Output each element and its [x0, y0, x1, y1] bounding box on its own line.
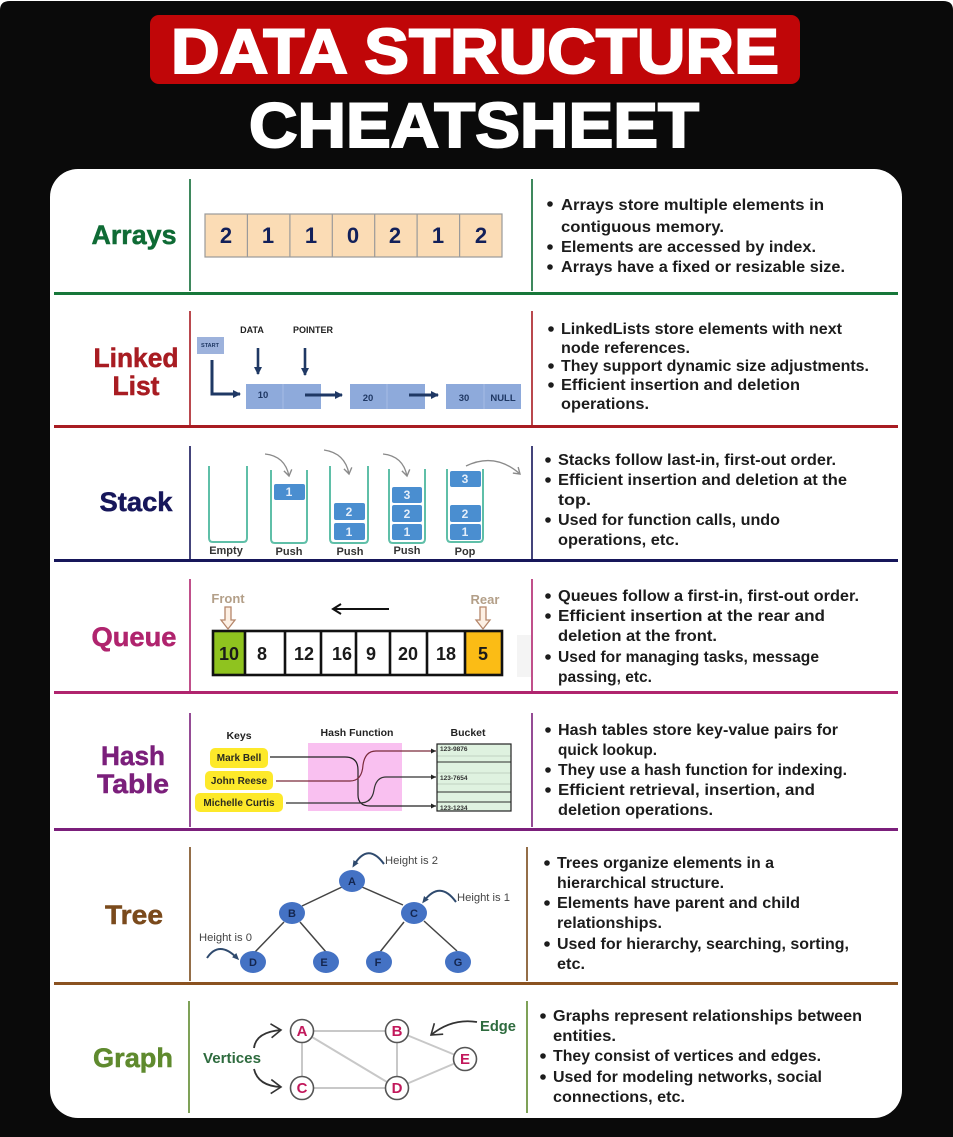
heading: linked list: List [112, 371, 160, 401]
graph diagram: Edge [480, 1018, 516, 1035]
queue diagram: Rear [471, 592, 499, 607]
stack diagram: 1 [286, 485, 293, 499]
hash table diagram: 123-7654 [440, 775, 468, 782]
tree diagram: B [288, 908, 296, 920]
array diagram [205, 214, 502, 257]
graph diagram: E [460, 1051, 470, 1068]
queue diagram [211, 591, 531, 677]
array diagram: 2 [389, 223, 401, 248]
bullets: queue: Used for managing tasks, message [558, 649, 819, 666]
linked list diagram: 20 [363, 393, 373, 404]
bullets: hash table: quick lookup. [558, 742, 657, 759]
hash table diagram: Mark Bell [217, 753, 261, 764]
bullets: queue: passing, etc. [558, 669, 652, 686]
array diagram: 0 [347, 223, 359, 248]
stack diagram: 2 [404, 507, 411, 521]
queue diagram: 8 [257, 644, 267, 664]
stack diagram: 3 [404, 488, 411, 502]
bullets: stack: Used for function calls, undo [558, 512, 780, 529]
stack diagram: Pop [455, 546, 476, 558]
heading: arrays: Arrays [92, 220, 176, 250]
linked list diagram [197, 325, 521, 409]
panel: queue [54, 579, 898, 694]
graph diagram [203, 1018, 516, 1100]
hash table diagram: 123-1234 [440, 805, 468, 812]
panel: stack [54, 446, 898, 562]
heading: linked list [94, 343, 178, 401]
linked list diagram: START [201, 343, 220, 349]
bullets: stack: operations, etc. [558, 532, 679, 549]
main panel [50, 169, 902, 1118]
stack diagram: 2 [346, 505, 353, 519]
graph diagram: D [392, 1080, 403, 1097]
bullets: tree [544, 855, 849, 973]
tree diagram: Height is 2 [385, 855, 438, 867]
queue diagram: 18 [436, 644, 456, 664]
hash table diagram: 123-9876 [440, 746, 468, 753]
bullets: graph: They consist of vertices and edges. [553, 1048, 821, 1065]
bullets: stack: Efficient insertion and deletion at the [558, 472, 847, 489]
panel: graph [93, 1001, 862, 1113]
queue diagram: 5 [478, 644, 488, 664]
bullets: tree: hierarchical structure. [557, 875, 724, 892]
bullets: stack: top. [558, 492, 591, 509]
stack diagram: Empty [209, 545, 244, 557]
bullets: linked list: Efficient insertion and deletion [561, 377, 800, 394]
queue diagram: 12 [294, 644, 314, 664]
panel: hash table [54, 713, 898, 831]
bullets: tree: etc. [557, 956, 585, 973]
bullets: graph: Used for modeling networks, social [553, 1069, 822, 1086]
bullets: hash table: deletion operations. [558, 802, 713, 819]
heading: hash table: Table [97, 769, 169, 799]
heading: tree: Tree [105, 900, 163, 930]
stack diagram: 1 [404, 525, 411, 539]
linked list diagram: DATA [240, 325, 264, 335]
bullets: queue: deletion at the front. [558, 628, 717, 645]
bullets: graph: connections, etc. [553, 1089, 685, 1106]
heading: stack: Stack [100, 487, 173, 517]
tree diagram: A [348, 876, 356, 888]
stack diagram: Push [394, 545, 421, 557]
graph diagram: B [392, 1023, 403, 1040]
panel: arrays [54, 179, 898, 295]
bullets: linked list: LinkedLists store elements with next [561, 321, 842, 338]
tree diagram: D [249, 957, 257, 969]
bullets: hash table: They use a hash function for indexing. [558, 762, 847, 779]
bullets: stack: Stacks follow last-in, first-out order. [558, 452, 836, 469]
stack diagram: 2 [462, 507, 469, 521]
bullets: arrays: Elements are accessed by index. [561, 239, 816, 256]
bullets: tree: relationships. [557, 915, 662, 932]
bullets: tree: Trees organize elements in a [557, 855, 774, 872]
title banner: DATA STRUCTURE [171, 17, 779, 87]
graph diagram: Vertices [203, 1050, 261, 1067]
queue diagram: Front [211, 591, 245, 606]
linked list diagram: NULL [490, 393, 516, 404]
queue diagram: 20 [398, 644, 418, 664]
stack diagram [209, 450, 520, 558]
bullets: graph [540, 1008, 862, 1106]
bullets: queue [545, 588, 859, 686]
tree diagram: C [410, 908, 418, 920]
graph diagram: C [297, 1080, 308, 1097]
stack diagram: 1 [346, 525, 353, 539]
linked list diagram: 30 [459, 393, 469, 404]
tree diagram [199, 853, 510, 973]
heading: linked list: Linked [94, 343, 178, 373]
hash table diagram [195, 727, 511, 812]
bullets: graph: Graphs represent relationships between [553, 1008, 862, 1025]
hash table diagram: Hash Function [321, 727, 393, 739]
bullets: tree: Used for hierarchy, searching, sorting, [557, 936, 849, 953]
tree diagram: Height is 1 [457, 892, 510, 904]
tree diagram: G [454, 957, 462, 969]
bullets: arrays: Arrays have a fixed or resizable size. [561, 259, 845, 276]
bullets: queue: Efficient insertion at the rear and [558, 608, 825, 625]
bullets: linked list: They support dynamic size adjustments. [561, 358, 869, 375]
subtitle: CHEATSHEET [249, 91, 699, 161]
tree diagram: F [375, 957, 382, 969]
bullets: stack [545, 452, 847, 549]
array diagram: 1 [305, 223, 317, 248]
stack diagram: Push [276, 546, 303, 558]
bullets: graph: entities. [553, 1028, 616, 1045]
array diagram: 2 [475, 223, 487, 248]
queue diagram: 16 [332, 644, 352, 664]
array diagram: 2 [220, 223, 232, 248]
heading: hash table [97, 741, 169, 799]
tree diagram: Height is 0 [199, 932, 252, 944]
bullets: tree: Elements have parent and child [557, 895, 800, 912]
hash table diagram: Keys [226, 730, 252, 742]
bullets: arrays [547, 197, 845, 276]
graph diagram: A [297, 1023, 308, 1040]
linked list diagram: POINTER [293, 325, 333, 335]
queue diagram: 9 [366, 644, 376, 664]
stack diagram: 1 [462, 525, 469, 539]
bullets: queue: Queues follow a first-in, first-out order. [558, 588, 859, 605]
panel: tree [54, 847, 898, 985]
bullets: hash table: Efficient retrieval, insertion, and [558, 782, 815, 799]
bullets: linked list: node references. [561, 340, 690, 357]
bullets: hash table [545, 722, 847, 819]
bullets: arrays: Arrays store multiple elements in [561, 197, 824, 214]
heading: graph: Graph [93, 1043, 173, 1073]
bullets: linked list [548, 321, 869, 413]
array diagram: 1 [262, 223, 274, 248]
bullets: arrays: contiguous memory. [561, 219, 724, 236]
stack diagram: Push [337, 546, 364, 558]
array diagram: 1 [432, 223, 444, 248]
bullets: linked list: operations. [561, 396, 649, 413]
hash table diagram: John Reese [211, 776, 268, 787]
hash table diagram: Michelle Curtis [203, 798, 275, 809]
panel: linked list [54, 311, 898, 428]
hash table diagram: Bucket [450, 727, 486, 739]
stack diagram: 3 [462, 472, 469, 486]
linked list diagram: 10 [258, 390, 268, 401]
tree diagram: E [320, 957, 328, 969]
heading: queue: Queue [92, 622, 176, 652]
queue diagram: 10 [219, 644, 239, 664]
bullets: hash table: Hash tables store key-value pairs for [558, 722, 838, 739]
heading: hash table: Hash [101, 741, 165, 771]
